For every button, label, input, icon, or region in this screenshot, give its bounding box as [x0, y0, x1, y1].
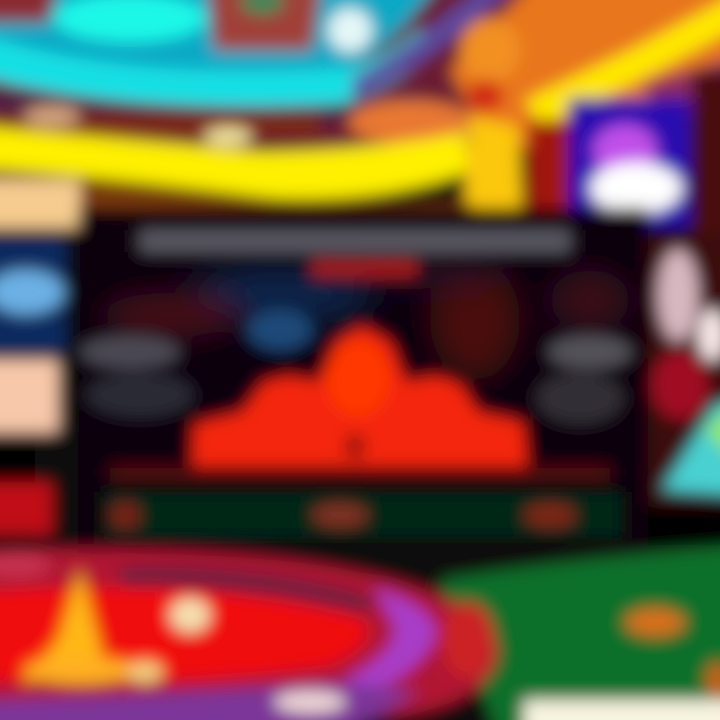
red mountain chart — [192, 326, 528, 470]
green table — [440, 546, 720, 720]
subtitle — [312, 260, 417, 276]
yellow ceiling band — [0, 116, 522, 224]
cyan band — [0, 0, 440, 81]
orange marker — [625, 608, 685, 636]
title bar — [140, 230, 570, 252]
upper right yellow beam — [450, 0, 720, 150]
wheel highlights — [20, 568, 102, 685]
right window — [528, 70, 720, 260]
purple edge — [350, 0, 520, 98]
right stat — [536, 336, 632, 424]
dark panel — [78, 208, 648, 550]
left stat — [80, 336, 194, 417]
left wall — [0, 180, 80, 534]
blue block — [248, 310, 312, 350]
bottom row — [104, 466, 622, 538]
right wall — [640, 235, 720, 545]
ceiling — [0, 0, 520, 150]
roulette wheel — [0, 549, 498, 720]
